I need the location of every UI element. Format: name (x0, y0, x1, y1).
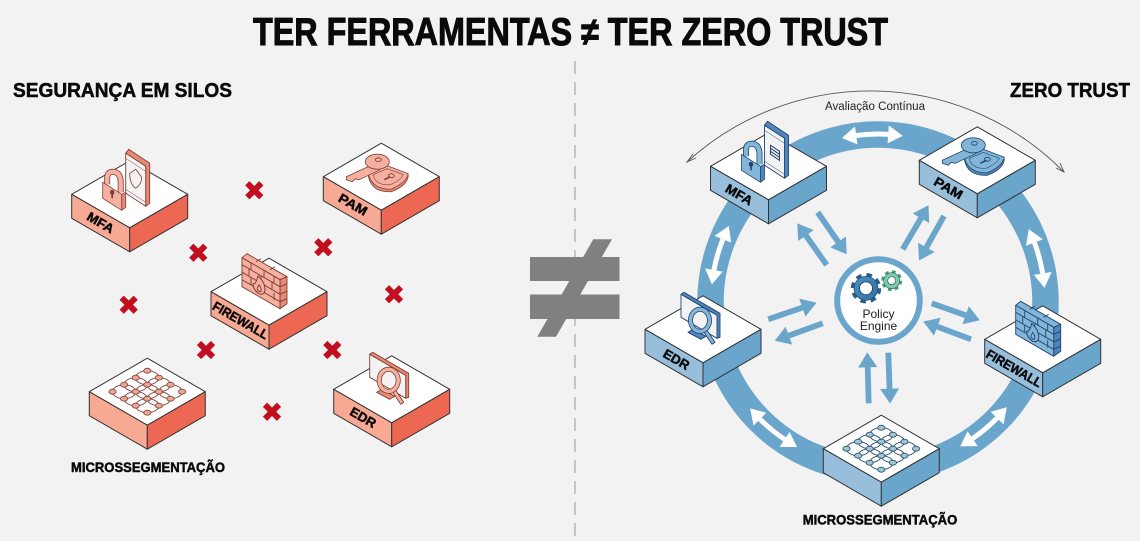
label: policy engine: Policy (862, 307, 895, 321)
arrow: ring MFA to PAM (842, 125, 903, 145)
block: PAM (919, 127, 1035, 218)
arrow: ring firewall to microsegmentation (956, 402, 1014, 455)
panel: segurança em silos (13, 80, 450, 475)
arrow: continuous evaluation arc (687, 91, 1064, 172)
arrows: engine and MFA (790, 207, 854, 270)
icons: red x marks (122, 183, 401, 419)
block: EDR (334, 352, 450, 447)
arrows: engine and firewall (920, 294, 983, 348)
arrow: ring PAM to firewall (1022, 226, 1055, 290)
block: MFA: MFA (723, 181, 756, 209)
panel: zero trust (645, 80, 1130, 528)
block: PAM: PAM (336, 190, 370, 219)
arrow: ring microsegmentation to EDR (743, 403, 801, 456)
block: firewall (210, 254, 327, 349)
block: firewall: FIREWALL (983, 346, 1045, 390)
block: microssegmentação (823, 415, 939, 506)
block: EDR: EDR (347, 404, 379, 431)
arrow: ring EDR to MFA (701, 223, 735, 286)
icon: gears (853, 272, 901, 301)
block: microssegmentação (89, 358, 205, 449)
arrows: engine and EDR (765, 294, 826, 350)
block: firewall (983, 301, 1101, 397)
heading: segurança em silos: SEGURANÇA EM SILOS (13, 80, 232, 102)
block: MFA (710, 121, 826, 224)
block: firewall: FIREWALL (210, 298, 271, 342)
title: TER FERRAMENTAS ≠ TER ZERO TRUST (253, 11, 888, 54)
icon: large not-equal sign (530, 239, 620, 337)
block: PAM (323, 143, 439, 234)
arrows: engine and microsegmentation (858, 352, 900, 404)
label: microssegmentação: MICROSSEGMENTAÇÃO (71, 458, 225, 475)
label: microssegmentação: MICROSSEGMENTAÇÃO (803, 510, 957, 528)
label: avaliação contínua: Avaliação Contínua (825, 101, 926, 113)
block: EDR: EDR (660, 346, 693, 373)
ring (710, 134, 1046, 470)
block: MFA (72, 149, 188, 252)
block: MFA: MFA (84, 209, 117, 237)
heading: zero trust: ZERO TRUST (1010, 80, 1130, 102)
block: EDR (645, 292, 761, 387)
policy engine (837, 259, 920, 342)
label: policy engine: Engine (860, 319, 898, 333)
block: PAM: PAM (931, 174, 966, 202)
arrows: engine and PAM (895, 201, 952, 265)
